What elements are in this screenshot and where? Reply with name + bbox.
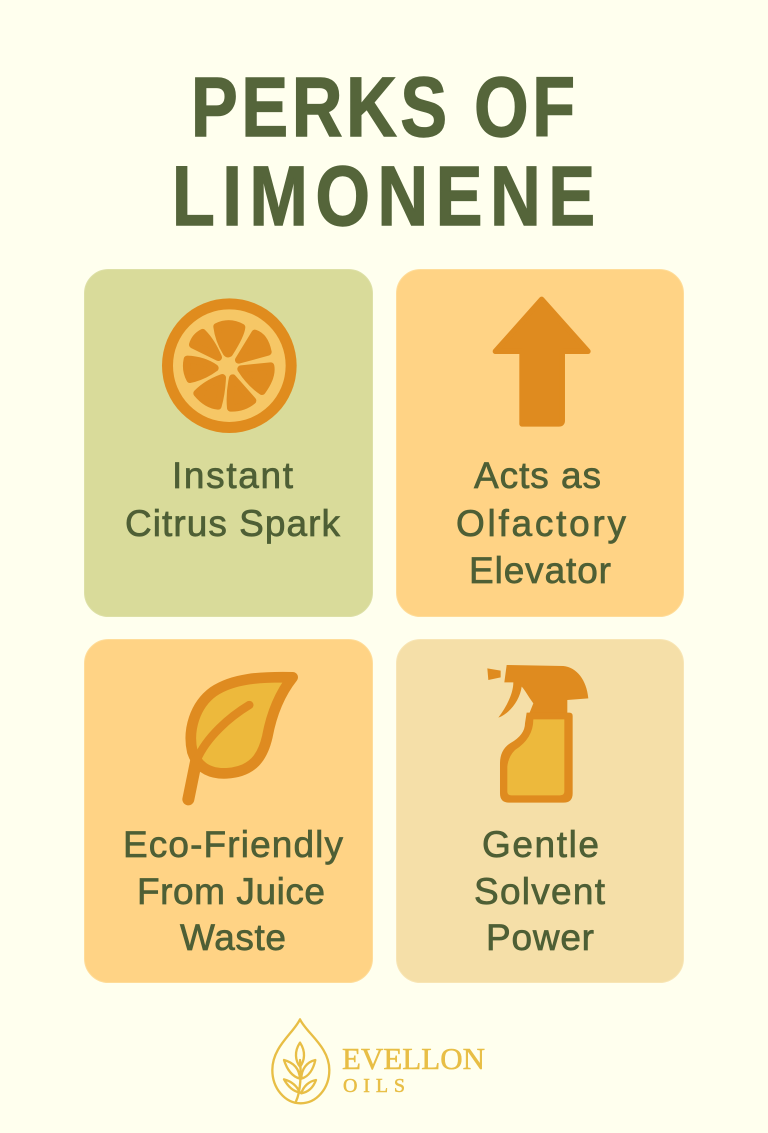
- label: Gentle: [482, 824, 599, 865]
- panel: gentle solvent power: [396, 640, 684, 982]
- label: [456, 455, 626, 591]
- icon: oil drop with sprig: [272, 1019, 329, 1103]
- title: PERKS OF: [191, 61, 575, 154]
- icon: leaf: [188, 677, 293, 799]
- title: [172, 61, 595, 243]
- panel: olfactory elevator: [396, 270, 684, 616]
- label: Citrus Spark: [125, 503, 340, 544]
- icon: orange slice: [162, 298, 297, 433]
- label: [474, 824, 606, 958]
- label: Instant: [172, 455, 294, 496]
- label: Eco-Friendly: [123, 824, 344, 865]
- title: LIMONENE: [172, 150, 595, 243]
- sub wordmark: OILS: [343, 1075, 405, 1097]
- logo: evellon oils: [272, 1019, 485, 1103]
- wordmark: EVELLON: [342, 1041, 485, 1076]
- label: Solvent: [474, 871, 606, 912]
- panel: eco-friendly: [84, 640, 372, 982]
- label: From Juice: [137, 871, 325, 912]
- label: Olfactory: [456, 503, 626, 544]
- label: [123, 824, 344, 958]
- panel: instant citrus spark: [84, 270, 372, 616]
- label: Acts as: [474, 455, 601, 496]
- label: Elevator: [469, 550, 611, 591]
- label: Waste: [180, 917, 286, 958]
- icon: up arrow: [495, 299, 588, 424]
- icon: spray bottle: [487, 665, 588, 803]
- label: Power: [486, 917, 594, 958]
- label: [125, 455, 340, 544]
